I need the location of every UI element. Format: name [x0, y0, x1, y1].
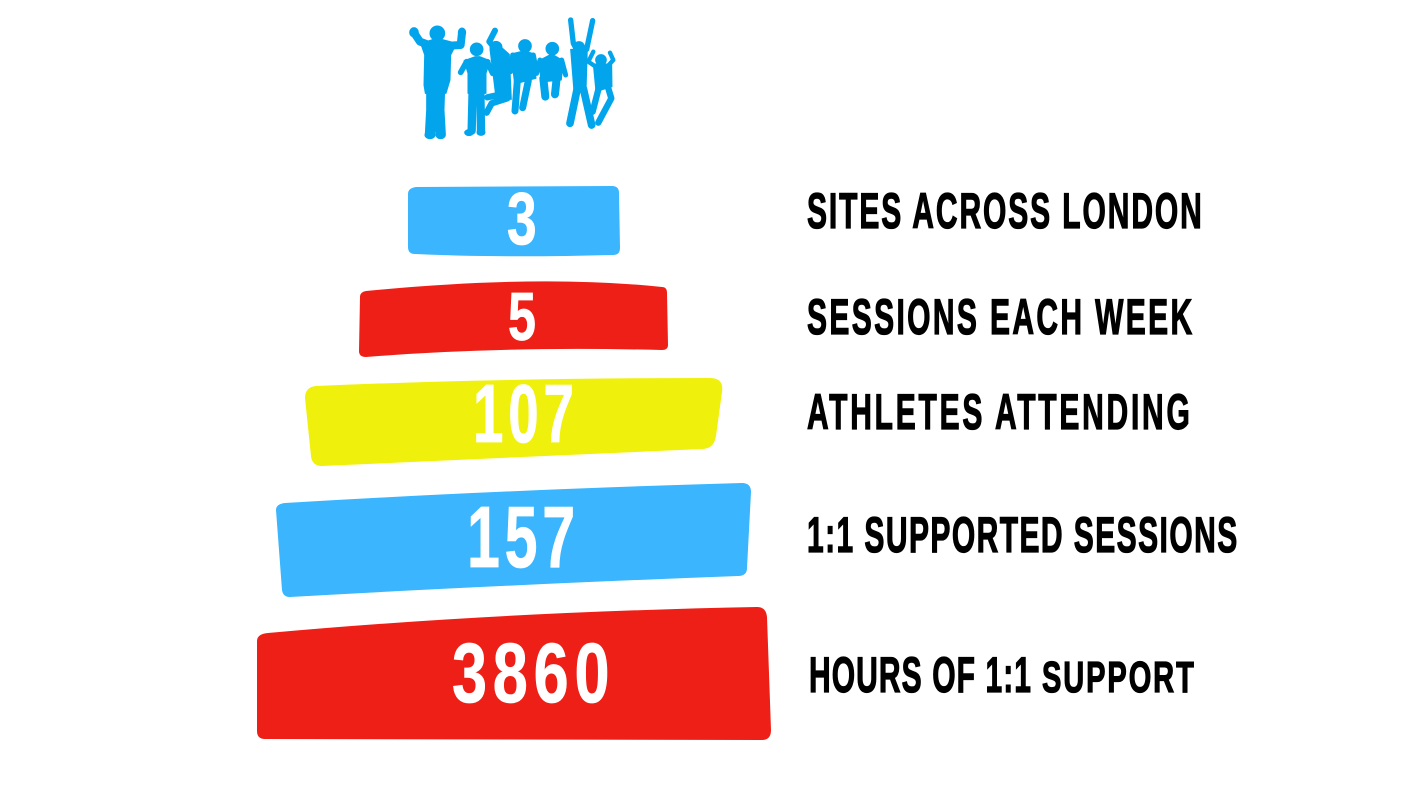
panel: tier 4 supported sessions — [276, 483, 751, 597]
number: 3860: 3860 — [452, 626, 610, 720]
label: sessions each week: SESSIONS EACH WEEK — [807, 289, 1192, 345]
number: 5: 5 — [508, 279, 536, 355]
number: 107: 107 — [473, 366, 574, 460]
label: hours of 1:1 support: SUPPORT — [1042, 652, 1194, 701]
label: 1:1 supported sessions: 1:1 SUPPORTED SESSIONS — [807, 507, 1237, 563]
label: hours of 1:1 support: HOURS OF 1:1 — [809, 647, 1031, 703]
number: 3: 3 — [507, 177, 537, 260]
label: sites across London: SITES ACROSS LONDON — [807, 183, 1202, 239]
panel: tier 3 athletes — [305, 366, 722, 466]
label: hours of 1:1 support — [809, 647, 1194, 703]
panel: tier 5 hours — [257, 607, 771, 740]
number: 157: 157 — [467, 489, 575, 586]
panel: tier 1 sites — [408, 177, 620, 260]
panel: tier 2 sessions — [359, 279, 668, 357]
label: athletes attending: ATHLETES ATTENDING — [807, 384, 1190, 440]
icon: jumping people silhouette — [410, 20, 613, 139]
